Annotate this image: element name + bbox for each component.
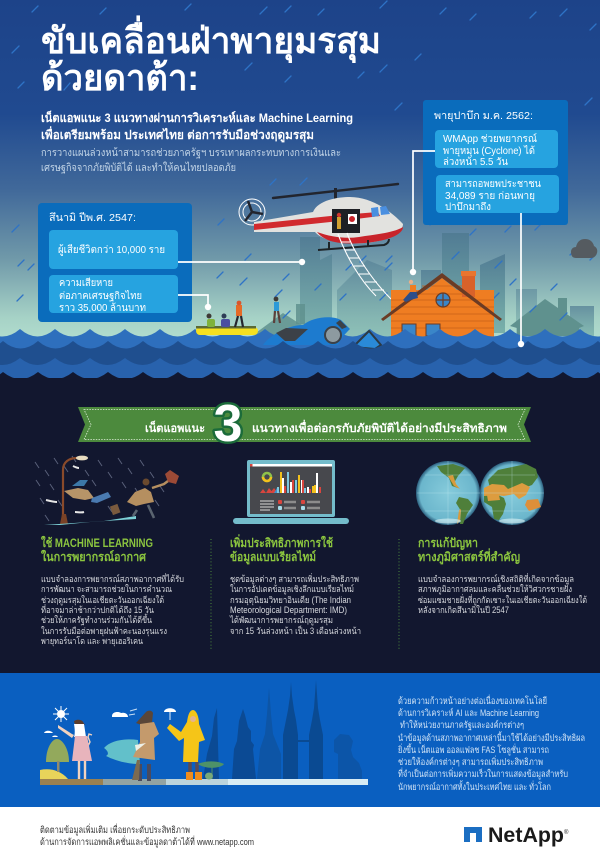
figure: rainy day woman	[164, 708, 224, 780]
closing paragraph	[398, 694, 585, 792]
closing paragraph: ช่วยให้องค์กรต่างๆ สามารถเพิ่มประสิทธิภาพ	[398, 755, 543, 767]
big number 3: 3	[214, 395, 242, 453]
intro text: การวางแผนล่วงหน้าสามารถช่วยภาครัฐฯ บรรเทาผลกระทบทางการเงินและ	[41, 147, 341, 159]
body: พายุทอร์นาโด และ พายุเฮอริเคน	[41, 636, 143, 647]
donut chart	[263, 473, 271, 481]
closing paragraph: ด้านการวิเคราะห์ AI และ Machine Learning	[398, 707, 539, 718]
icon: world map globes	[416, 461, 544, 525]
body	[418, 573, 587, 615]
figure: windy day woman	[104, 709, 159, 781]
NetApp logo: NetApp	[488, 824, 564, 847]
body: จาก 15 วันล่วงหน้า เป็น 3 เดือนล่วงหน้า	[230, 625, 361, 636]
stat: forecast: ล่วงหน้า 5.5 วัน	[443, 156, 508, 168]
heading: pabuk: พายุปาบึก ม.ค. 2562:	[434, 110, 533, 122]
body	[229, 573, 361, 636]
column 1: machine learning	[41, 535, 184, 647]
figure: sunny day woman	[40, 706, 92, 779]
stat: economic damage: ต่อภาคเศรษฐกิจไทย	[59, 290, 142, 302]
body: แบบจำลองการพยากรณ์เชิงสถิติที่เกิดจากข้อมูล	[418, 573, 574, 585]
connector lines: tsunami	[178, 259, 305, 310]
icon: laptop with dashboard	[233, 460, 349, 524]
heading	[41, 535, 153, 564]
icon: people in a storm	[35, 456, 179, 525]
stat: evacuation: 34,089 ราย ก่อนพายุ	[445, 191, 535, 202]
city skyline	[300, 233, 594, 340]
heading: tsunami: สึนามิ ปีพ.ศ. 2547:	[49, 211, 136, 224]
body: ชุดข้อมูลต่างๆ สามารถเพิ่มประสิทธิภาพ	[230, 573, 359, 585]
cloud icon	[571, 239, 597, 258]
body: ช่วงฤดูมรสุมในเอเชียตะวันออกเฉียงใต้	[41, 595, 164, 606]
skyline landmarks	[203, 680, 362, 779]
NetApp logo: ®	[564, 829, 569, 836]
closing paragraph: ทำให้หน่วยงานภาครัฐและองค์กรต่างๆ	[400, 719, 524, 731]
intro text	[41, 147, 341, 174]
gray house background	[253, 298, 584, 337]
icon: tail rotor	[239, 199, 265, 225]
title: ด้วยดาต้า:	[41, 57, 199, 98]
stat: deaths	[49, 230, 178, 269]
stat: economic damage	[49, 275, 178, 314]
heading: ใช้ MACHINE LEARNING	[41, 535, 153, 550]
stat: economic damage: ราว 35,000 ล้านบาท	[59, 302, 146, 314]
column 2: real-time data	[229, 534, 361, 636]
subtitle: เพื่อเตรียมพร้อม ประเทศไทย ต่อการรับมือช่วงฤดูมรสุม	[41, 126, 314, 143]
rescue helicopter	[239, 184, 403, 299]
heading: ทางภูมิศาสตร์ที่สำคัญ	[418, 548, 520, 565]
footer call to action	[40, 823, 254, 848]
stat: economic damage: ความเสียหาย	[59, 277, 113, 289]
banner text left: เน็ตแอพแนะ	[145, 420, 205, 435]
heading	[230, 534, 333, 565]
stat: forecast	[435, 130, 558, 168]
bar chart	[278, 472, 320, 493]
body: หลังจากเกิดสึนามิในปี 2547	[418, 605, 509, 615]
rope ladder	[338, 233, 391, 299]
body: ที่อาจมาล่าช้ากว่าปกติได้ถึง 15 วัน	[41, 604, 154, 615]
heading	[418, 536, 520, 565]
heading: การแก้ปัญหา	[418, 536, 478, 550]
stat: forecast: WMApp ช่วยพยากรณ์	[443, 133, 537, 145]
panel: blue closing section	[0, 673, 600, 807]
stat: deaths: ผู้เสียชีวิตกว่า 10,000 ราย	[58, 243, 165, 256]
body: ได้พัฒนาการพยากรณ์ฤดูมรสุม	[229, 615, 333, 626]
footer call to action: ติดตามข้อมูลเพิ่มเติม เพื่อยกระดับประสิทธิภาพ	[40, 823, 190, 836]
closing paragraph: นักพยากรณ์อากาศทั้งในประเทศไทย และ ทั่วโลก	[398, 779, 551, 792]
body: ช่วยให้ภาครัฐทำงานร่วมกันได้ดีขึ้น	[41, 613, 152, 626]
banner: 3 approaches	[78, 395, 531, 453]
title: ขับเคลื่อนฝ่าพายุมรสุม	[41, 15, 381, 64]
rain streaks	[12, 1, 596, 320]
body: กรมอุตุนิยมวิทยาอินเดีย (The Indian	[230, 595, 351, 606]
orange house	[381, 271, 502, 338]
closing paragraph: ด้วยความก้าวหน้าอย่างต่อเนื่องของเทคโนโลยี	[398, 694, 547, 706]
body: แบบจำลองการพยากรณ์สภาพอากาศที่ได้รับ	[41, 573, 184, 584]
column 3: geographic problems	[418, 536, 587, 615]
title	[41, 15, 381, 98]
dark lower background	[0, 372, 600, 674]
panel: tsunami 2547	[38, 203, 192, 322]
subtitle: เน็ตแอพแนะ 3 แนวทางผ่านการวิเคราะห์และ Machine Learning	[41, 110, 353, 125]
wave: front bright row	[0, 329, 600, 350]
closing paragraph: ยิ่งขึ้น เน็ตแอพ ออลแฟลช FAS โซลูชั่น สามารถ	[398, 742, 549, 756]
stat: evacuation	[436, 175, 559, 213]
body: ในการอัปเดตข้อมูลเชิงลึกแบบเรียลไทม์	[230, 584, 354, 595]
stat: evacuation: ปาบึกมาถึง	[445, 201, 491, 213]
panel: cyclone pabuk 2562	[423, 100, 568, 225]
sunken car	[263, 317, 381, 349]
rescue boat and people	[196, 297, 280, 335]
body	[41, 573, 184, 647]
heading: ในการพยากรณ์อากาศ	[41, 549, 146, 564]
stat: evacuation: สามารถอพยพประชาชน	[445, 179, 541, 190]
body: สภาพภูมิอากาศลมและคลื่นช่วยให้วิศวกรชายฝั่ง	[418, 583, 572, 595]
waves: back rows	[0, 341, 600, 392]
body: ในการรับมือต่อพายุฝนฟ้าคะนองรุนแรง	[41, 626, 167, 637]
subtitle	[41, 110, 353, 143]
heading: เพิ่มประสิทธิภาพการใช้	[230, 534, 333, 550]
ground strip	[40, 779, 368, 785]
panel: stormy sky background	[0, 0, 600, 345]
footer call to action: ด้านการจัดการแอพพลิเคชั่นและข้อมูลดาต้าได้ที่ www.netapp.com	[40, 835, 254, 848]
banner text right: แนวทางเพื่อต่อกรกับภัยพิบัติได้อย่างมีประสิทธิภาพ	[252, 419, 507, 435]
heading: ข้อมูลแบบเรียลไทม์	[230, 549, 316, 565]
intro text: เศรษฐกิจจากภัยพิบัติได้ และทำให้คนไทยปลอดภัย	[41, 161, 236, 174]
body: Meteorological Department: IMD)	[230, 605, 347, 615]
man on roof	[403, 290, 418, 302]
connector lines: pabuk	[410, 151, 524, 347]
stat: forecast: พายุหมุน (Cyclone) ได้	[443, 145, 535, 157]
body: การพัฒนา จะสามารถช่วยในการคำนวณ	[41, 584, 172, 594]
